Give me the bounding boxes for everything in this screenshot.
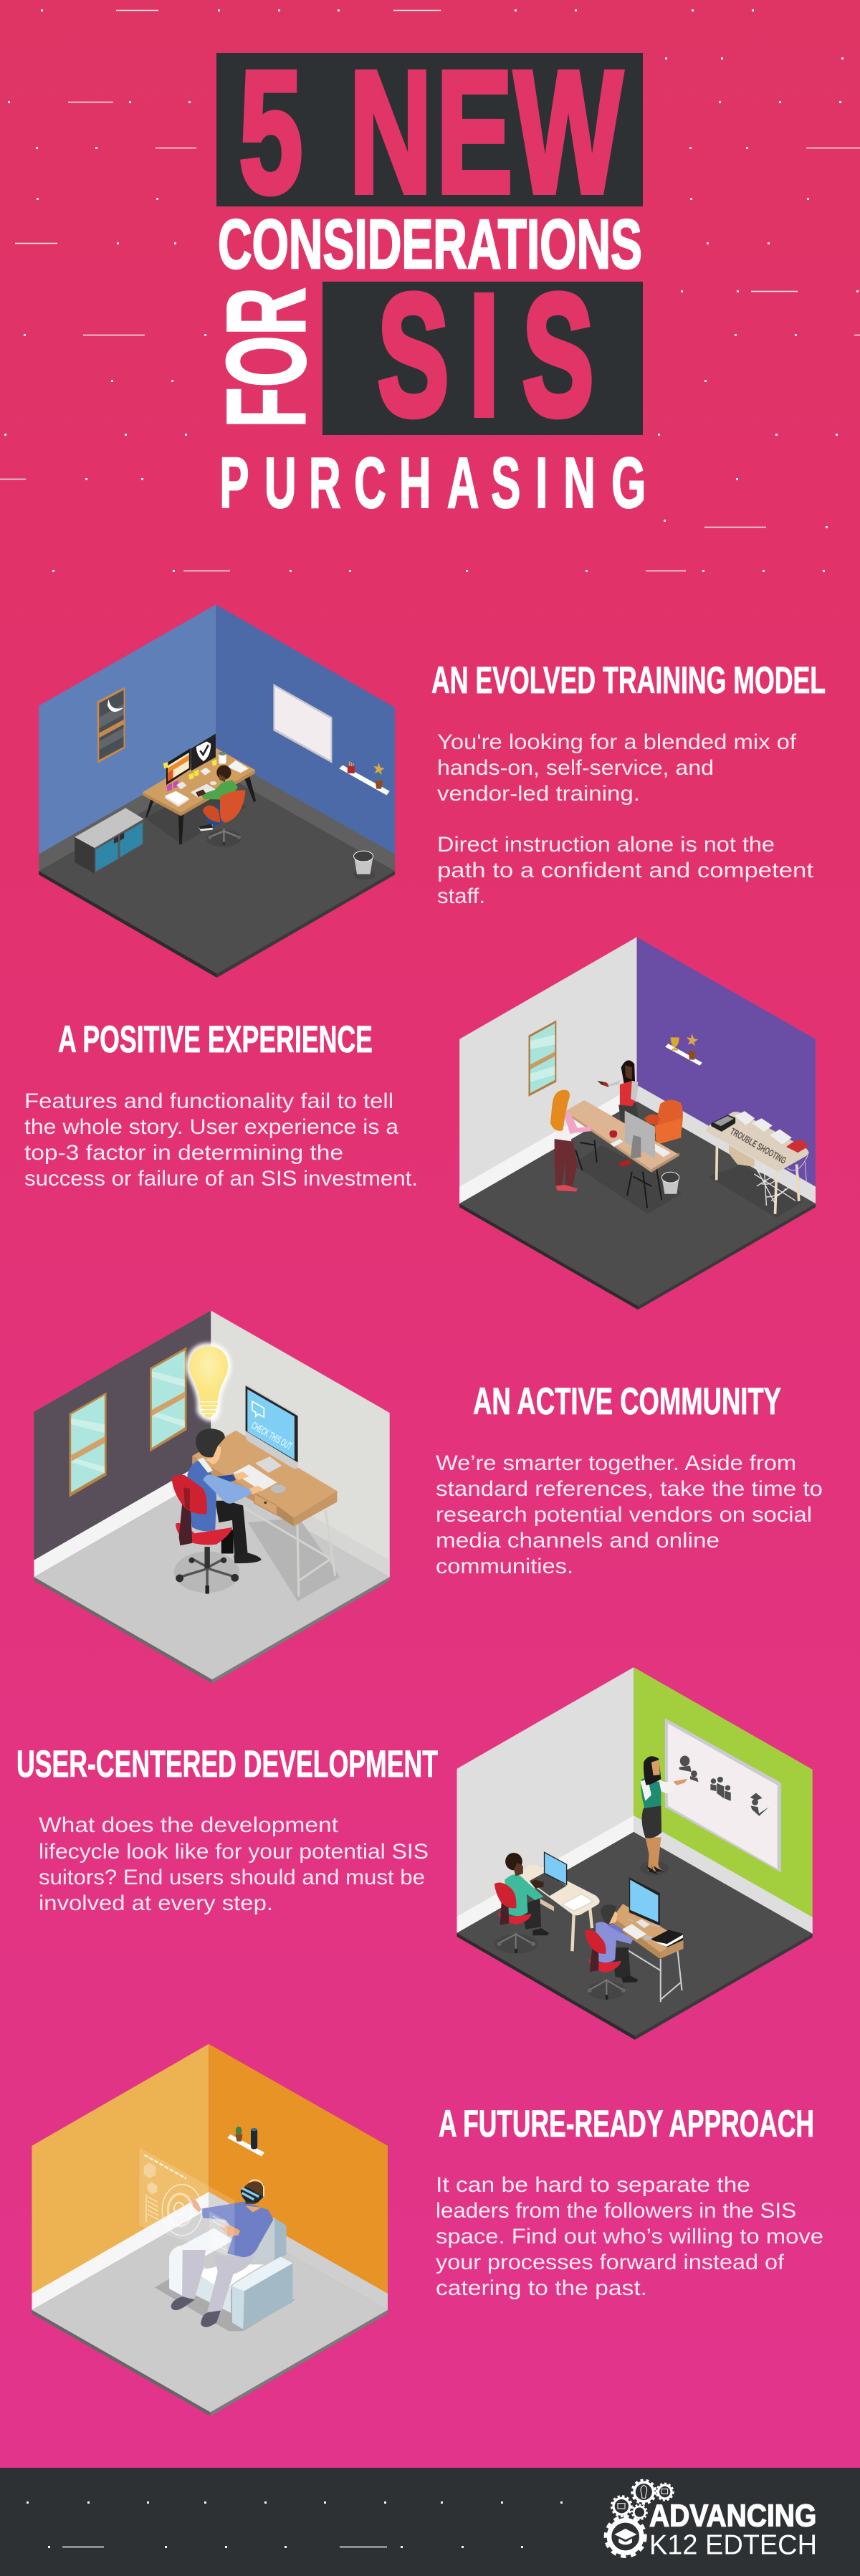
body text — [39, 1813, 429, 1915]
body text — [436, 2173, 823, 2300]
table shadow — [573, 1145, 682, 1214]
body text: communities. — [436, 1555, 573, 1578]
sofa — [155, 2213, 295, 2331]
orange armchair — [644, 1099, 683, 1144]
man on red office chair — [171, 1428, 264, 1594]
desk with monitors — [143, 734, 256, 844]
desk shadow — [145, 783, 247, 844]
body text: your processes forward instead of — [436, 2251, 785, 2274]
windows — [70, 1347, 186, 1497]
panel: an active community — [34, 1310, 823, 1684]
holographic display — [140, 2147, 234, 2257]
troubleshooting desk with spider web: TROUBLE SHOOTING — [729, 1126, 788, 1166]
waste bin — [353, 851, 375, 879]
window — [528, 1020, 556, 1097]
body text: We’re smarter together. Aside from — [436, 1451, 796, 1475]
table with monitor — [565, 1100, 679, 1208]
panel: an evolved training model — [39, 604, 826, 978]
left desk and student with laptop — [494, 1852, 600, 1954]
title box: 5 NEW — [216, 53, 643, 206]
logo gears icon — [606, 2480, 673, 2556]
body text: top-3 factor in determining the — [24, 1141, 343, 1165]
body text: What does the development — [39, 1813, 339, 1837]
illustration: purple meeting room — [459, 937, 816, 1310]
title text: FOR (rotated): FOR — [204, 287, 329, 428]
troubleshooting desk with spider web — [707, 1111, 809, 1218]
body text: You're looking for a blended mix of — [437, 730, 797, 754]
desk with keyboard and monitor — [192, 1385, 337, 1596]
standing woman with orange hair — [550, 1090, 591, 1191]
body text: staff. — [437, 884, 485, 908]
body text: Features and functionality fail to tell — [24, 1089, 393, 1113]
illustration: green classroom — [457, 1667, 813, 2040]
whiteboard — [273, 684, 333, 763]
heading: A POSITIVE EXPERIENCE — [58, 1019, 373, 1061]
title text: PURCHASING: PURCHASING — [219, 443, 646, 523]
body text — [436, 1451, 823, 1578]
panel: a positive experience — [24, 937, 816, 1310]
title box: SIS — [322, 282, 643, 435]
body text — [437, 730, 814, 908]
body text: lifecycle look like for your potential SIS — [39, 1840, 429, 1864]
body text: leaders from the followers in the SIS — [436, 2199, 796, 2223]
desk with keyboard and monitor: CHECK THIS OUT — [249, 1420, 294, 1453]
body text: space. Find out who’s willing to move — [436, 2225, 823, 2248]
body text: It can be hard to separate the — [436, 2173, 750, 2197]
seated woman in red vest — [597, 1060, 639, 1167]
right desk and student with monitor — [585, 1877, 684, 2002]
footer band — [0, 2468, 860, 2576]
person at orange chair — [196, 765, 246, 847]
body text: hands-on, self-service, and — [437, 756, 714, 780]
illustration: blue office room — [39, 604, 395, 978]
title text: 5 NEW: 5 NEW — [239, 34, 623, 229]
body text: catering to the past. — [436, 2276, 647, 2300]
body text: success or failure of an SIS investment. — [24, 1167, 418, 1191]
window with moon — [97, 687, 125, 763]
body text: media channels and online — [436, 1529, 720, 1552]
illustration: grey room with lightbulb — [34, 1310, 390, 1684]
logo wordmark: ADVANCING: ADVANCING — [649, 2499, 816, 2533]
illustration: orange VR room — [32, 2044, 388, 2416]
logo wordmark: K12 EDTECH: K12 EDTECH — [649, 2529, 817, 2560]
lightbulb — [189, 1346, 228, 1418]
title text: CONSIDERATIONS: CONSIDERATIONS — [218, 205, 642, 283]
body text: the whole story. User experience is a — [24, 1115, 398, 1139]
body text: path to a confident and competent — [437, 859, 814, 882]
body text: vendor-led training. — [437, 782, 640, 806]
panel: a future-ready approach — [32, 2044, 823, 2416]
title block — [204, 34, 646, 523]
body text: suitors? End users should and must be — [39, 1866, 425, 1889]
heading: USER-CENTERED DEVELOPMENT — [16, 1743, 438, 1785]
floor shadow under desk — [248, 1517, 340, 1601]
wall shelf with speaker and cactus — [227, 2127, 264, 2157]
wall shelf with trophy and plant — [665, 1034, 702, 1066]
body text: standard references, take the time to — [436, 1477, 823, 1501]
whiteboard with icons — [665, 1718, 781, 1872]
body text: research potential vendors on social — [436, 1503, 812, 1527]
teacher standing — [640, 1756, 687, 1876]
wall shelf with mug and plant — [339, 761, 390, 795]
panel: user-centered development — [16, 1667, 813, 2040]
logo: Advancing K12 EdTech — [606, 2480, 817, 2560]
man with VR headset — [171, 2180, 273, 2327]
body text: involved at every step. — [39, 1892, 273, 1915]
body text — [24, 1089, 418, 1191]
body text: Direct instruction alone is not the — [437, 833, 775, 857]
waste bin — [661, 1172, 679, 1194]
cabinet — [75, 808, 144, 874]
title text: SIS: SIS — [378, 259, 593, 452]
